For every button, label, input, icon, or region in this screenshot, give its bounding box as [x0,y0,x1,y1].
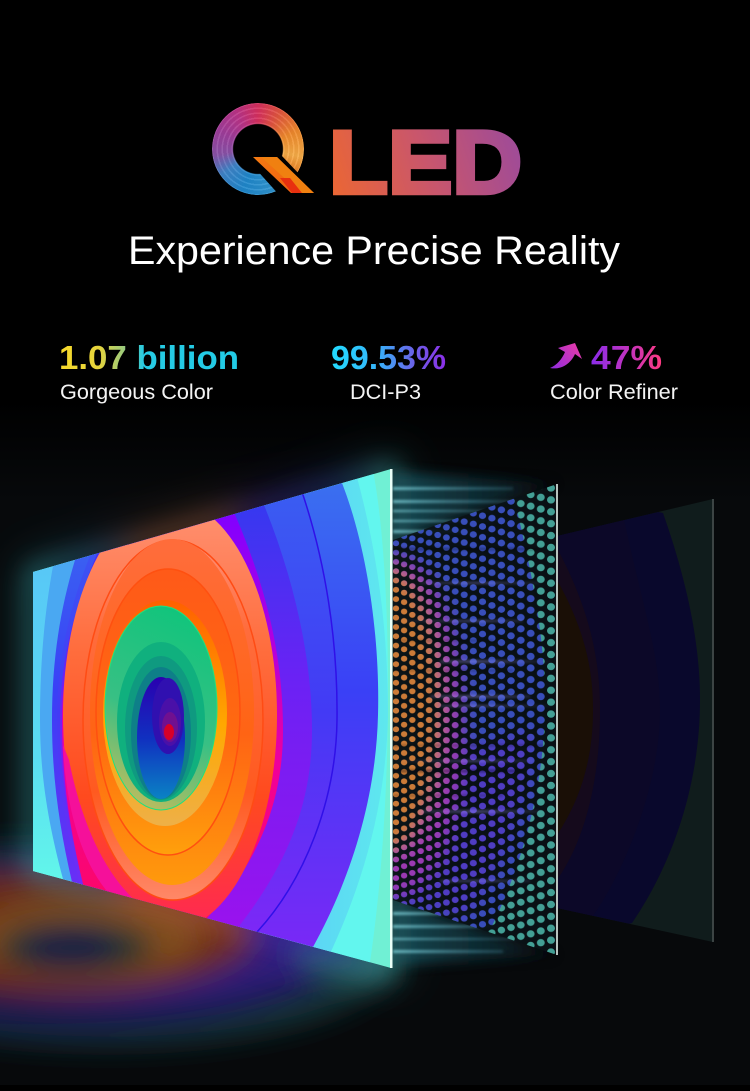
light beams between screen and dot panel [393,472,557,965]
screen right edge highlight [390,469,392,968]
blue tunnel [137,677,185,799]
rear panel edge [712,499,714,942]
orange outer disc [63,500,277,930]
orange ring [90,539,254,885]
dots [393,485,555,954]
blue ring [52,483,378,947]
bottom black strip [0,1085,750,1091]
outer cyan field [30,465,395,970]
stat: 1.07 billion Gorgeous Color: 1.07 billion [59,339,239,376]
magenta ring [62,514,283,918]
Q ring [212,103,304,195]
Q tail [253,156,314,193]
quantum dot panel [393,484,558,955]
inner tunnel [162,712,178,742]
violet ring [60,506,312,927]
red centre [164,724,174,740]
green disc [105,606,217,810]
heading: Experience Precise Reality [128,229,620,273]
stat: 99.53% DCI-P3: DCI-P3 [350,381,421,404]
logo: Q mark [212,103,314,195]
stat: 1.07 billion Gorgeous Color: Gorgeous Color [60,381,213,404]
deep teal ring [131,667,191,799]
stat: up 47% Color Refiner [550,339,678,404]
left cyan panel section [33,540,143,891]
main TV screen [33,469,390,968]
dark ring line [257,492,337,932]
yellow-orange rim [103,600,227,826]
blue inner ring [60,494,336,932]
purple tunnel [152,678,184,754]
rear panel: faint colour filter [558,500,712,942]
icon: up arrow [550,343,582,368]
horizontal light streaks over dots [393,548,550,882]
stat: 99.53% DCI-P3: 99.53% [331,339,446,376]
dot panel edge [556,484,558,955]
magenta tunnel [159,698,181,746]
floor colour reflection [0,834,400,1056]
green ring two [117,642,205,802]
wordmark: LED: LED [329,112,522,212]
screen glow [33,469,391,968]
lower-left magenta sweep [63,746,132,898]
stat: up 47% Color Refiner: Color Refiner [550,381,678,404]
stat: 1.07 billion Gorgeous Color [59,339,239,404]
stat: up 47% Color Refiner: 47% [591,339,662,376]
stat: 99.53% DCI-P3 [331,339,446,404]
salmon ring [83,540,263,900]
deep orange ring [96,569,240,855]
teal ring [125,656,197,800]
light blue sweep [40,478,388,952]
